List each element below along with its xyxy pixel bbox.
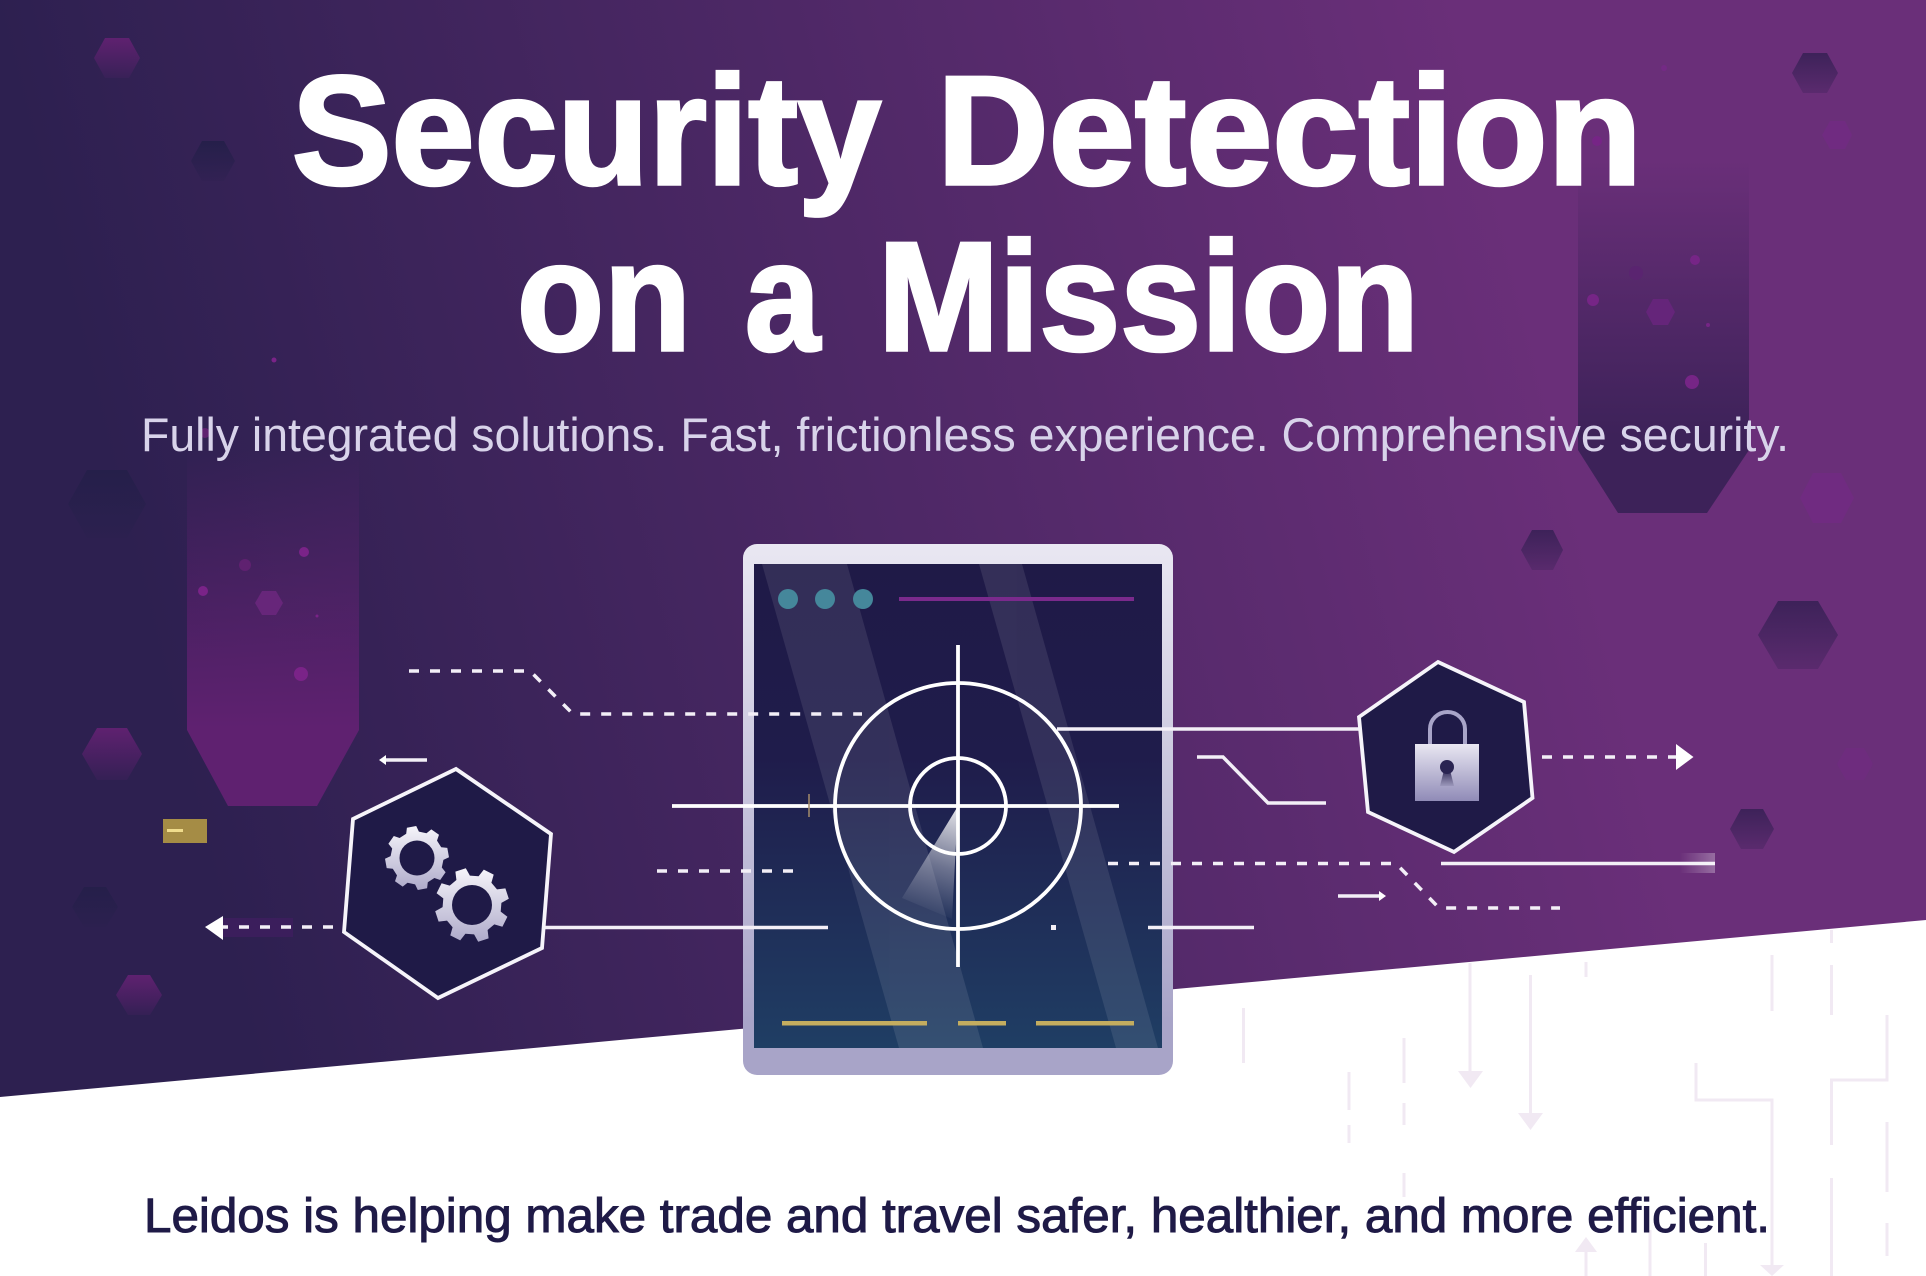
title: Mission xyxy=(878,210,1419,383)
radar beam xyxy=(902,806,958,919)
title: a xyxy=(745,210,822,383)
gold badge xyxy=(163,819,207,843)
white lower section xyxy=(0,920,1926,1276)
device screen xyxy=(754,564,1162,1048)
right beam shape with particles xyxy=(1578,65,1749,513)
light bands xyxy=(762,564,1158,1048)
pale circuit lines in white section xyxy=(1244,930,1887,1276)
gears hexagon icon xyxy=(344,769,551,998)
dashed right arrow xyxy=(1542,744,1694,770)
right background hexagons xyxy=(1521,53,1873,849)
title: Security xyxy=(292,44,881,217)
status dots xyxy=(778,589,873,609)
left background hexagons xyxy=(68,38,235,1015)
purple header line xyxy=(899,597,1134,601)
target reticle xyxy=(672,645,1119,967)
dashed left arrow xyxy=(205,916,335,940)
right side connector lines xyxy=(1051,729,1715,930)
bottom tagline: Leidos is helping make trade and travel safer, healthier, and more efficient. xyxy=(144,1190,1770,1243)
padlock hexagon icon xyxy=(1359,662,1532,852)
title xyxy=(292,44,1642,383)
title: Detection xyxy=(937,44,1642,217)
left arrow trail xyxy=(223,918,293,937)
left side connector lines xyxy=(409,671,862,928)
icon: large gear xyxy=(435,868,509,942)
left beam shape with particles xyxy=(187,358,359,806)
line end glow xyxy=(1680,853,1715,873)
device frame xyxy=(743,544,1173,1075)
small right arrow xyxy=(1338,891,1386,901)
title: on xyxy=(517,210,691,383)
subtitle: Fully integrated solutions. Fast, frictionless experience. Comprehensive security. xyxy=(141,408,1789,461)
scanner device xyxy=(672,544,1173,1075)
yellow status lines xyxy=(782,1021,1134,1026)
icon: padlock xyxy=(1415,712,1479,801)
icon: small gear xyxy=(385,826,449,890)
small left arrow xyxy=(379,755,427,765)
